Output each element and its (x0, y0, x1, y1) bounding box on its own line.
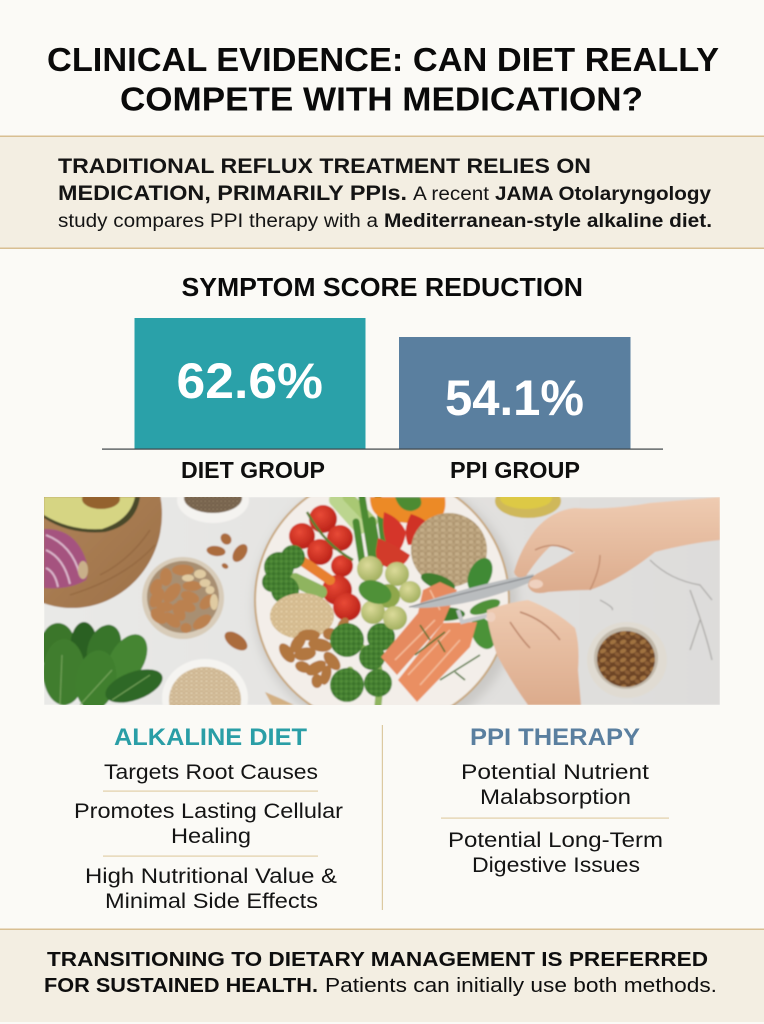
drawback: nutrient malabsorption: Malabsorption (480, 786, 631, 809)
icon: Brussels sprouts (357, 556, 421, 630)
panel: PPI therapy (441, 724, 669, 877)
icon: cucumber and green beans (336, 497, 385, 568)
benefit: nutritional value: Minimal Side Effects (105, 890, 318, 913)
icon: olive oil dish (494, 497, 562, 519)
icon: spinach leaves (44, 621, 164, 705)
icon: basil (355, 554, 502, 653)
icon: loose almonds (206, 531, 251, 654)
icon: sesame bowl (162, 659, 248, 705)
icon: plate (253, 497, 511, 705)
icon: carrot (298, 558, 330, 580)
bar: diet group: 62.6% (176, 353, 323, 409)
benefit: nutritional value: High Nutritional Value & (85, 865, 337, 888)
drawback: digestive issues (448, 829, 663, 877)
icon: wooden board (44, 497, 163, 609)
title: COMPETE WITH MEDICATION? (120, 80, 643, 118)
icon: salmon fillets (381, 582, 480, 702)
bar: PPI group: 54.1% (445, 370, 584, 426)
benefit: nutritional value (85, 865, 337, 913)
bar: diet group (134, 318, 366, 449)
icon: red onion (44, 529, 88, 588)
introduction text: JAMA Otolaryngology (495, 184, 711, 205)
icon: upper hand holding knife (514, 497, 720, 593)
icon: avocado (44, 497, 140, 534)
icon: lentils (411, 513, 487, 587)
title: CLINICAL EVIDENCE: CAN DIET REALLY (47, 41, 719, 78)
panel: alkaline diet (74, 724, 343, 913)
drawback: digestive issues: Digestive Issues (472, 854, 640, 877)
conclusion text (44, 948, 717, 997)
benefit: targets root causes: Targets Root Causes (104, 761, 318, 784)
icon: almonds on plate (276, 616, 351, 688)
introduction text: Mediterranean-style alkaline diet. (384, 211, 712, 232)
icon: broccoli (262, 545, 320, 604)
icon: lower hand holding fork (486, 600, 581, 705)
introduction text: MEDICATION, PRIMARILY PPIs. (58, 182, 407, 205)
benefit: cellular healing (74, 800, 343, 848)
introduction text: study compares PPI therapy with a (58, 211, 378, 232)
heading: alkaline diet: ALKALINE DIET (114, 724, 307, 751)
drawback: nutrient malabsorption (461, 761, 649, 809)
drawback: digestive issues: Potential Long-Term (448, 829, 663, 852)
icon: bowl of almonds (142, 557, 224, 639)
bar: PPI group (399, 337, 630, 449)
benefit: cellular healing: Promotes Lasting Cellular (74, 800, 343, 823)
icon: cherry tomatoes (289, 505, 361, 621)
icon: walnut bowl (587, 622, 667, 698)
introduction text: TRADITIONAL REFLUX TREATMENT RELIES ON (58, 155, 591, 178)
icon: knife (409, 574, 534, 608)
shadow of plate (252, 497, 520, 705)
conclusion text: FOR SUSTAINED HEALTH. (44, 974, 318, 997)
conclusion text: Patients can initially use both methods. (325, 975, 717, 997)
photo: healthy Mediterranean meal on marble (44, 497, 720, 705)
panel: conclusion band (0, 928, 764, 1022)
benefit: cellular healing: Healing (171, 825, 251, 848)
heading: PPI therapy: PPI THERAPY (470, 724, 640, 751)
introduction text (58, 155, 712, 232)
icon: quinoa (270, 593, 334, 639)
introduction text: A recent (413, 184, 490, 205)
conclusion text: TRANSITIONING TO DIETARY MANAGEMENT IS PREFERRED (47, 948, 708, 971)
label: PPI group: PPI GROUP (450, 457, 580, 483)
drawback: nutrient malabsorption: Potential Nutrient (461, 761, 649, 784)
icon: wooden spoon tip (265, 692, 294, 705)
icon: broccoli florets on plate (330, 623, 395, 705)
icon: seed bowl (178, 497, 249, 523)
label: diet group: DIET GROUP (181, 457, 325, 483)
icon: peppers and tomato wedges (370, 497, 445, 568)
panel: introduction band (0, 136, 764, 249)
icon: fork (455, 609, 488, 626)
bar chart (102, 318, 663, 483)
title (47, 41, 719, 118)
chart heading: SYMPTOM SCORE REDUCTION (182, 272, 583, 302)
